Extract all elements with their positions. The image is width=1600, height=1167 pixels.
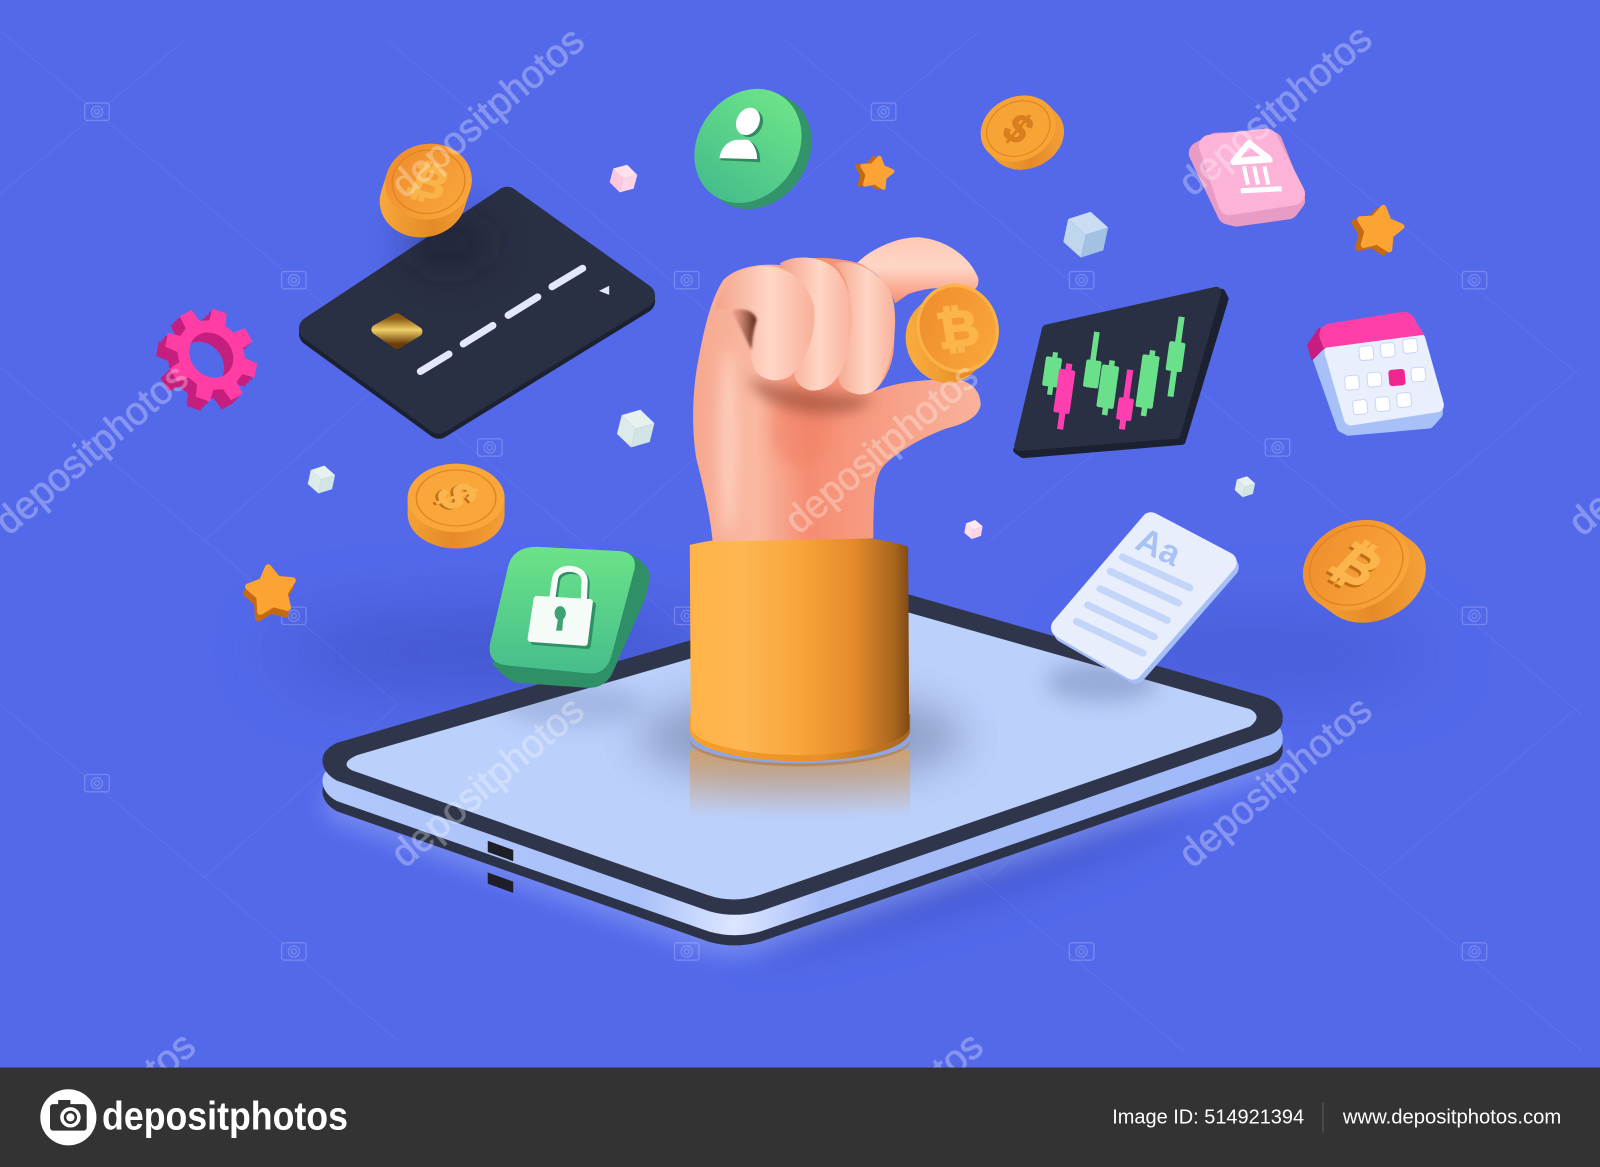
divider bbox=[1322, 1102, 1323, 1133]
calendar cells bbox=[1344, 338, 1426, 415]
watermarks: depositphotos bbox=[1171, 688, 1380, 876]
calendar header side bbox=[1308, 329, 1324, 359]
icon: gear bbox=[139, 293, 274, 427]
chart panel edge bbox=[1017, 293, 1224, 454]
user body bbox=[720, 142, 760, 162]
calendar header bbox=[1319, 312, 1424, 348]
wrist highlight bbox=[719, 348, 738, 535]
watermarks: depositphotos bbox=[1171, 17, 1380, 205]
hand holding coin bbox=[693, 237, 1009, 542]
document lines bbox=[1077, 557, 1190, 653]
cube: pale left bbox=[306, 463, 337, 496]
calendar body bbox=[1332, 340, 1437, 418]
tablet side bbox=[322, 606, 1283, 935]
coin: bitcoin top left: ₿ bbox=[400, 153, 457, 211]
watermarks: depositphotos bbox=[383, 688, 593, 876]
coin: dollar top right: $ bbox=[993, 105, 1043, 153]
card bbox=[311, 199, 643, 427]
cube: pink bbox=[608, 162, 639, 196]
finger three bbox=[833, 262, 895, 394]
star: center bbox=[854, 154, 894, 190]
icon: calendar bbox=[1308, 312, 1437, 430]
finger one bbox=[715, 266, 814, 380]
tablet screen bbox=[346, 604, 1257, 899]
document title: Aa bbox=[1130, 521, 1187, 574]
index fingertip (top finger) bbox=[857, 237, 978, 303]
tablet base edge bbox=[322, 616, 1283, 945]
star: right bbox=[1350, 203, 1404, 255]
coin: bitcoin bottom right: ₿ bbox=[1314, 533, 1394, 602]
icon: bank tile bbox=[1200, 140, 1294, 215]
coin: bitcoin bottom right bbox=[1288, 503, 1424, 627]
held coin bbox=[906, 274, 1009, 382]
coin: bitcoin top left bbox=[379, 137, 478, 226]
card edge bbox=[311, 204, 643, 427]
soft ground shadow bbox=[276, 616, 1429, 972]
chart panel face bbox=[1019, 292, 1216, 446]
cube: small pink bbox=[963, 519, 983, 541]
coin: dollar left: $ bbox=[424, 477, 492, 515]
finger two bbox=[780, 258, 852, 391]
finger hollow bbox=[732, 309, 757, 350]
ports bbox=[488, 841, 513, 893]
bank symbol bbox=[1232, 143, 1282, 191]
cube: pale right bbox=[1234, 474, 1256, 499]
calendar highlighted day bbox=[1388, 369, 1406, 386]
coin: dollar left: $ bbox=[421, 478, 489, 516]
cuff bbox=[690, 535, 910, 766]
icon: lock tile bbox=[490, 547, 650, 688]
lock tile side bbox=[492, 551, 650, 688]
chart panel bbox=[1017, 292, 1224, 454]
document face bbox=[1061, 522, 1227, 669]
star: left bbox=[243, 564, 297, 619]
tablet bbox=[322, 586, 1283, 945]
held coin: ₿ bbox=[933, 298, 983, 361]
palm silhouette bbox=[693, 258, 981, 542]
bottom bar bbox=[0, 1067, 1600, 1167]
image id: Image ID: 514921394 bbox=[1112, 1106, 1304, 1128]
lock symbol bbox=[531, 569, 593, 646]
user head bbox=[734, 106, 768, 141]
bank tile face bbox=[1210, 140, 1294, 204]
logo wordmark: depositphotos bbox=[102, 1095, 348, 1139]
card chip bbox=[377, 318, 417, 344]
screen shadows and cuff reflection bbox=[500, 661, 1158, 817]
watermarks: depositphotos bbox=[383, 19, 593, 207]
shadow under fingers bbox=[748, 377, 873, 414]
document side bbox=[1064, 527, 1229, 673]
document bbox=[1061, 521, 1229, 673]
card coin shadow bbox=[406, 214, 492, 271]
candles bbox=[1042, 316, 1186, 430]
card face bbox=[311, 199, 643, 421]
watermarks: depositphotos bbox=[777, 355, 986, 543]
site url: www.depositphotos.com bbox=[1342, 1106, 1561, 1128]
bank tile side bbox=[1200, 143, 1294, 215]
icon: user badge bbox=[672, 68, 834, 230]
coin: dollar top right bbox=[970, 84, 1067, 174]
coin: dollar left bbox=[408, 464, 505, 532]
calendar side bbox=[1318, 352, 1437, 430]
lock tile face bbox=[490, 547, 635, 674]
cube: large blue bbox=[1061, 207, 1111, 262]
logo icon bbox=[40, 1089, 96, 1145]
card triangle bbox=[599, 286, 609, 295]
coin: bitcoin bottom right: ₿ bbox=[1317, 530, 1396, 600]
palm deep shade bbox=[770, 387, 830, 467]
card number dashes bbox=[420, 268, 583, 371]
cube: pale middle bbox=[615, 406, 657, 451]
tablet bezel bbox=[322, 586, 1283, 915]
